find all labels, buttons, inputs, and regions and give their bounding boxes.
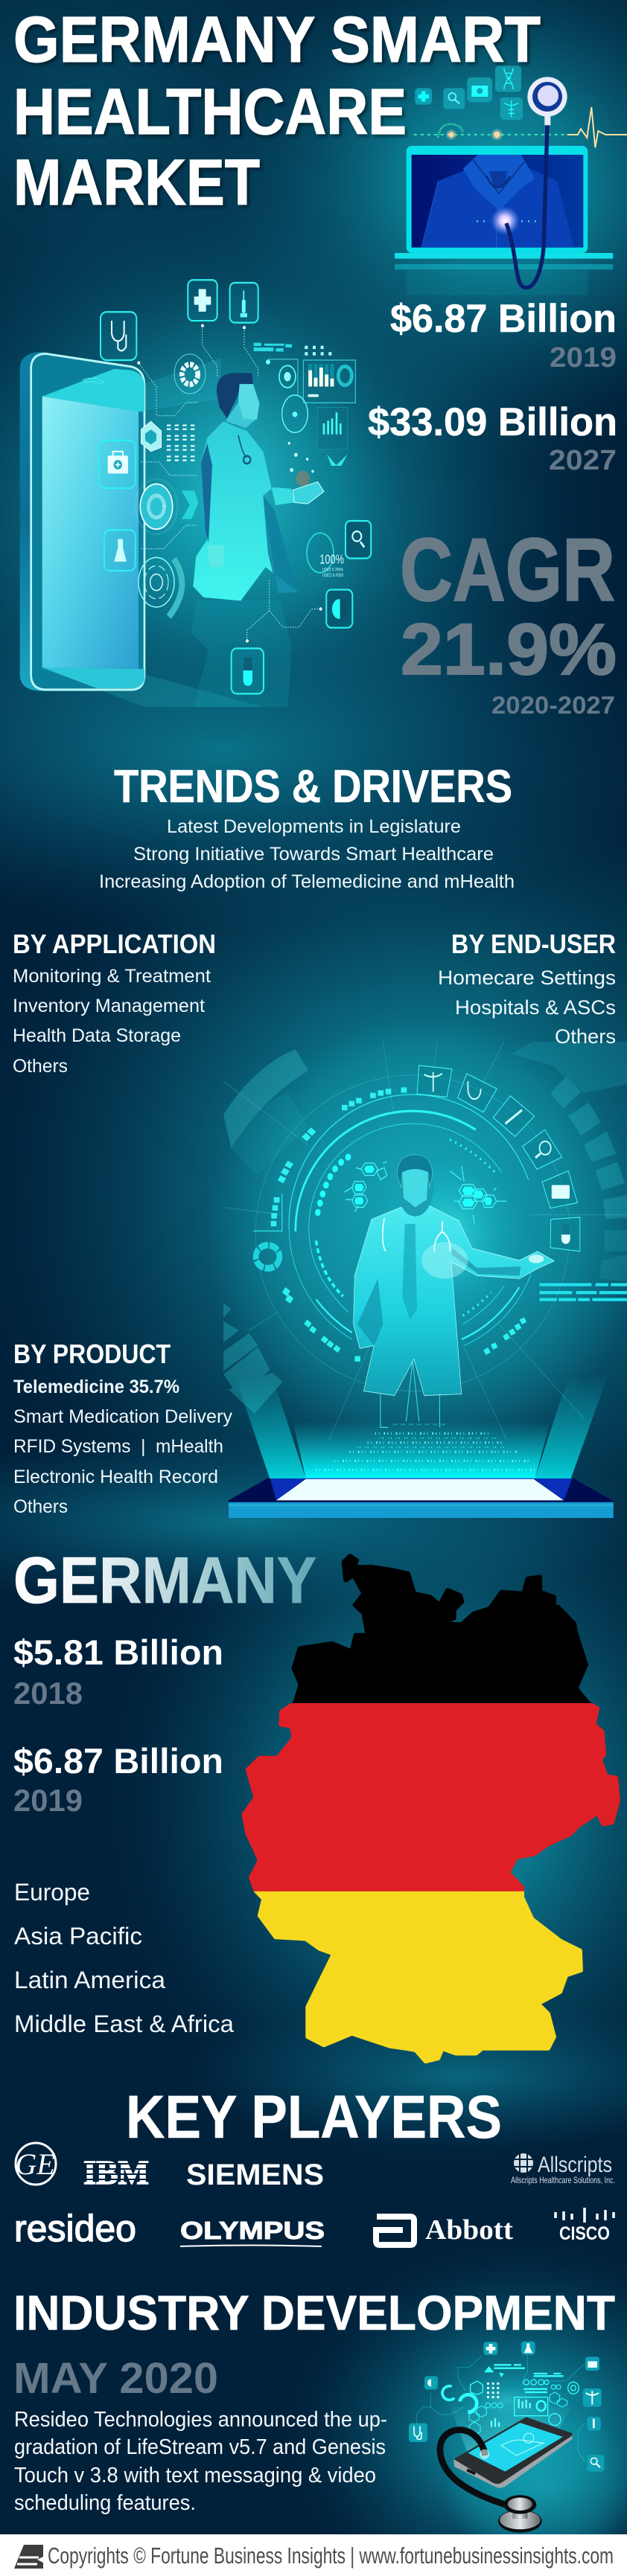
logo: Siemens: SIEMENS (186, 2159, 324, 2191)
title: GERMANY SMART (13, 4, 541, 76)
market values (368, 297, 617, 476)
Germany values (13, 1633, 223, 1818)
icon: stethoscope (101, 312, 136, 360)
market values: 2019 (550, 342, 617, 374)
regions: Middle East & Africa (14, 2011, 234, 2037)
hud (416, 2355, 585, 2461)
Germany values: 2019 (13, 1783, 83, 1818)
by product: Smart Medication Delivery (13, 1406, 232, 1427)
regions: Europe (14, 1879, 90, 1906)
phone (229, 1478, 612, 1518)
Germany values: 2018 (13, 1676, 83, 1711)
trends and drivers (99, 761, 515, 892)
phone (20, 352, 145, 691)
logo: IBM: IBM (83, 2153, 149, 2191)
title: HEALTHCARE (13, 76, 407, 148)
by product: Electronic Health Record (13, 1467, 218, 1487)
icon: search (346, 521, 371, 558)
logo: Allscripts: Allscripts (538, 2153, 612, 2177)
illustration: smartphone and stethoscope (409, 2342, 604, 2533)
CAGR: 2020-2027 (491, 691, 615, 719)
hud icons (417, 1066, 580, 1252)
regions: Asia Pacific (14, 1923, 142, 1949)
Germany values: $5.81 Billion (13, 1633, 223, 1672)
by product: Others (13, 1496, 68, 1517)
logo: Allscripts (511, 2153, 615, 2185)
logo: Cisco (556, 2208, 614, 2244)
by application: Monitoring & Treatment (13, 966, 211, 987)
icons (409, 2342, 604, 2472)
by application: Health Data Storage (13, 1025, 181, 1046)
icon: syringe (230, 283, 258, 323)
by end-user: Hospitals & ASCs (455, 996, 616, 1019)
small icons (415, 65, 523, 120)
footer logo (14, 2545, 43, 2569)
icon: flask (104, 530, 136, 571)
development text (14, 2408, 387, 2515)
illustration: phone and doctor: 100% (319, 552, 344, 567)
by product: RFID Systems | mHealth (13, 1436, 223, 1457)
by application: BY APPLICATION (13, 929, 216, 959)
icon: medical kit (99, 440, 136, 488)
development text: Touch v 3.8 with text messaging & video (14, 2464, 376, 2487)
logo: Abbott: Abbott (425, 2214, 513, 2246)
hud circles (174, 354, 206, 394)
phone (453, 2433, 572, 2488)
by product (13, 1339, 232, 1517)
by product: BY PRODUCT (13, 1339, 171, 1369)
particles (316, 1434, 535, 1470)
development text: Resideo Technologies announced the up- (14, 2408, 387, 2432)
illustration: phone and doctor (20, 275, 397, 707)
doctor figure (381, 1361, 439, 1427)
title (13, 4, 541, 219)
map: Germany flag (244, 1556, 618, 2061)
market values: $33.09 Billion (368, 400, 617, 444)
beams (235, 1376, 306, 1478)
circuit lines (139, 326, 321, 641)
by application: Inventory Management (13, 996, 205, 1016)
logo: Olympus: OLYMPUS (180, 2217, 325, 2244)
footer (0, 2534, 627, 2576)
by application: Others (13, 1056, 68, 1077)
CAGR (400, 520, 617, 719)
stethoscope (440, 2430, 505, 2505)
heading: Germany: GERMANY (13, 1543, 316, 1617)
trends and drivers: TRENDS & DRIVERS (114, 761, 512, 813)
logo: Abbott (376, 2214, 513, 2246)
development text: scheduling features. (14, 2491, 196, 2515)
data lines (540, 1285, 627, 1300)
illustration: holographic doctor (208, 1017, 627, 1518)
by product: Telemedicine 35.7% (13, 1377, 179, 1397)
by application (13, 929, 216, 1077)
trends and drivers: Increasing Adoption of Telemedicine and mHealth (99, 871, 515, 892)
by end-user: Others (555, 1025, 616, 1048)
illustration: phone and doctor: USED 5.780% (322, 567, 343, 573)
illustration: phone and doctor: USED 8.0059 (322, 573, 343, 578)
regions (14, 1879, 234, 2037)
icon: half moon (326, 590, 352, 628)
date: MAY 2020 (13, 2354, 218, 2403)
logo: Resideo: resideo (14, 2208, 136, 2249)
Germany values: $6.87 Billion (13, 1741, 223, 1781)
trends and drivers: Strong Initiative Towards Smart Healthcare (133, 844, 494, 865)
molecules (344, 1162, 506, 1224)
CAGR: 21.9% (401, 609, 617, 690)
by end-user (438, 929, 616, 1048)
heading: key players: KEY PLAYERS (126, 2083, 502, 2151)
title: MARKET (13, 147, 260, 219)
trends and drivers: Latest Developments in Legislature (167, 816, 461, 837)
regions: Latin America (14, 1967, 165, 1993)
icon: pill (232, 648, 264, 693)
logo: Cisco: CISCO (559, 2223, 610, 2244)
illustration: laptop with stethoscope (395, 65, 627, 295)
icon: plus (188, 280, 217, 321)
market values: 2027 (549, 445, 617, 476)
development text: gradation of LifeStream v5.7 and Genesis (14, 2435, 386, 2459)
doctor (191, 600, 292, 707)
by end-user: Homecare Settings (438, 967, 616, 989)
logo: GE: GE (15, 2147, 55, 2181)
market values: $6.87 Billion (390, 297, 617, 341)
